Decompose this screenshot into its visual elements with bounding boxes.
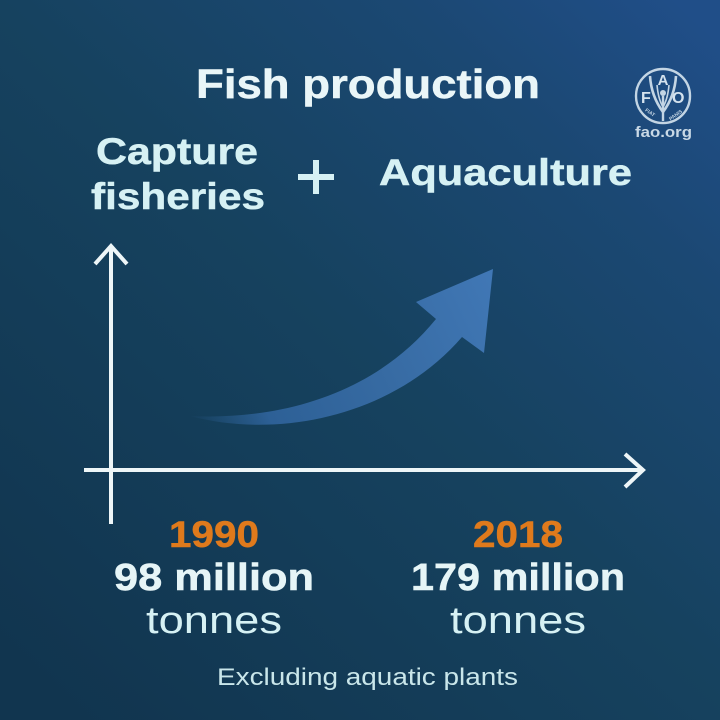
footnote: Excluding aquatic plants <box>217 664 518 691</box>
chart axes <box>84 246 643 524</box>
label: capture fisheries: Capture <box>96 131 258 172</box>
FAO logo: PANIS <box>668 109 684 122</box>
FAO logo <box>635 69 692 141</box>
1990 data block: 98 million <box>114 557 314 599</box>
FAO logo: fao.org <box>635 124 692 141</box>
2018 data block: 2018 <box>473 514 563 555</box>
growth arrow <box>190 269 493 425</box>
1990 data block: 1990 <box>169 514 259 555</box>
label: capture fisheries: fisheries <box>91 176 265 217</box>
title: Fish production <box>196 61 540 107</box>
2018 data block <box>411 514 625 642</box>
label: aquaculture: Aquaculture <box>379 152 632 193</box>
FAO logo: A <box>658 72 669 89</box>
plus sign <box>298 160 334 194</box>
1990 data block <box>114 514 314 642</box>
2018 data block: 179 million <box>411 557 625 599</box>
2018 data block: tonnes <box>450 600 586 642</box>
FAO logo: O <box>672 90 684 107</box>
label: capture fisheries <box>91 131 265 217</box>
1990 data block: tonnes <box>146 600 282 642</box>
FAO logo: F <box>641 90 651 107</box>
FAO logo: FIAT <box>644 107 656 119</box>
